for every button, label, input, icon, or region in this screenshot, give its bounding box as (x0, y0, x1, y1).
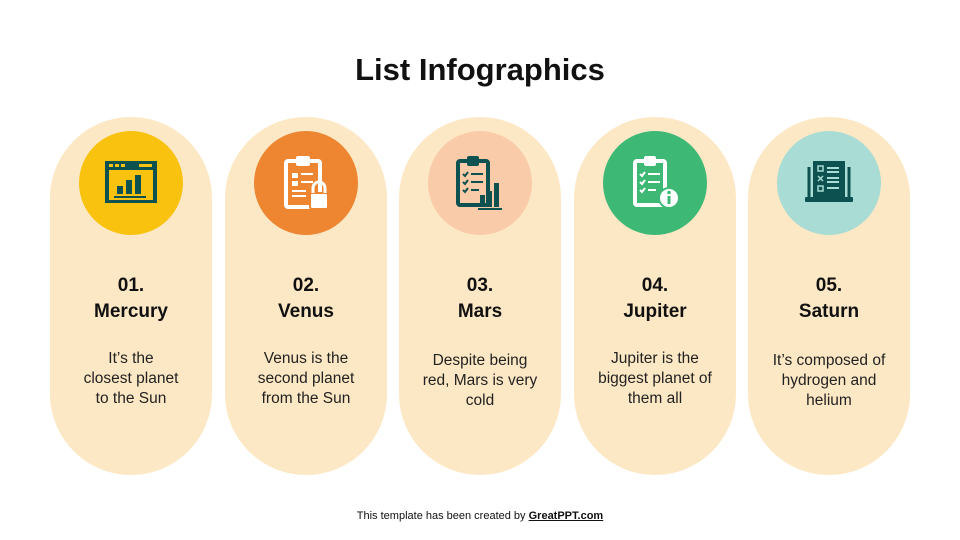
heading: Venus (278, 301, 334, 322)
heading: Jupiter (623, 301, 687, 322)
title: List Infographics (355, 52, 605, 87)
text (423, 352, 538, 409)
heading (458, 275, 502, 322)
text: cold (466, 392, 494, 409)
heading (799, 275, 859, 322)
text: second planet (258, 370, 354, 387)
heading (278, 275, 334, 322)
text: closest planet (84, 370, 178, 387)
text: to the Sun (96, 390, 166, 407)
text: Jupiter is the (611, 350, 699, 367)
heading: Mars (458, 301, 502, 322)
panel: jupiter (574, 117, 736, 475)
text (84, 350, 178, 407)
heading: 03. (467, 275, 493, 296)
heading: Saturn (799, 301, 859, 322)
heading: 02. (293, 275, 319, 296)
panel: venus (225, 117, 387, 475)
text (598, 350, 712, 407)
text: hydrogen and (782, 372, 876, 389)
icon: checklist info (603, 131, 707, 235)
text: It’s composed of (773, 352, 885, 369)
panel: saturn (748, 117, 910, 475)
text: It’s the (108, 350, 154, 367)
footer: This template has been created by GreatPPT.com (357, 510, 603, 522)
icon: clipboard lock (254, 131, 358, 235)
heading: 01. (118, 275, 144, 296)
text: from the Sun (262, 390, 350, 407)
heading: 04. (642, 275, 668, 296)
text (258, 350, 354, 407)
text: them all (628, 390, 682, 407)
panel: mercury (50, 117, 212, 475)
icon: laptop list (777, 131, 881, 235)
heading (623, 275, 687, 322)
text: helium (806, 392, 852, 409)
panel: mars (399, 117, 561, 475)
icon: checklist chart (428, 131, 532, 235)
icon: browser chart (79, 131, 183, 235)
heading: 05. (816, 275, 842, 296)
text: Despite being (433, 352, 527, 369)
heading (94, 275, 168, 322)
text: Venus is the (264, 350, 348, 367)
heading: Mercury (94, 301, 168, 322)
text (773, 352, 886, 409)
text: red, Mars is very (423, 372, 537, 389)
text: biggest planet of (598, 370, 712, 387)
